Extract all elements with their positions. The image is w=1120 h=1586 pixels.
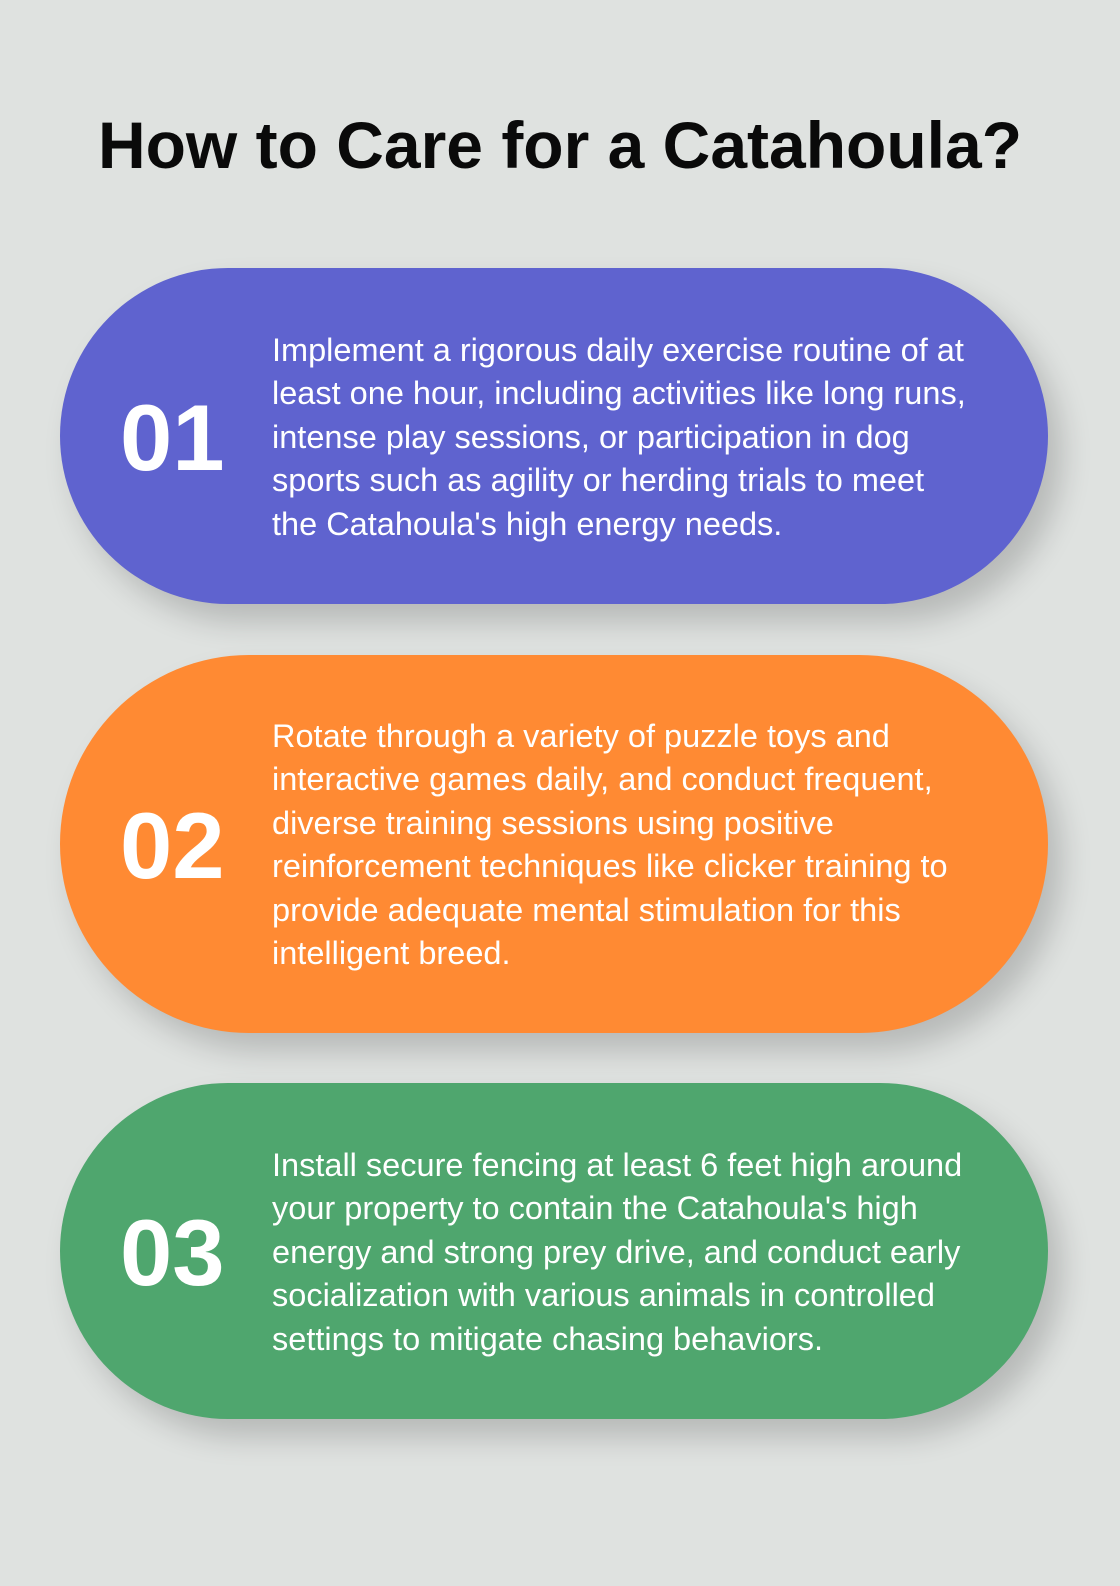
text 02: Rotate through a variety of puzzle toys and — [272, 718, 890, 754]
text 01: sports such as agility or herding trials to meet — [272, 462, 924, 498]
panel: step 02 — [60, 655, 1048, 1033]
text 03: socialization with various animals in controlled — [272, 1277, 935, 1313]
text 01 — [272, 332, 966, 542]
text 03: settings to mitigate chasing behaviors. — [272, 1321, 823, 1357]
text 02: provide adequate mental stimulation for this — [272, 892, 901, 928]
text 03: energy and strong prey drive, and conduct early — [272, 1234, 960, 1270]
panel: step 01 — [60, 268, 1048, 604]
text 02: reinforcement techniques like clicker training to — [272, 848, 948, 884]
text 01: Implement a rigorous daily exercise routine of at — [272, 332, 964, 368]
text 01: least one hour, including activities like long runs, — [272, 375, 966, 411]
text 02: interactive games daily, and conduct frequent, — [272, 761, 933, 797]
number 03: 03 — [120, 1200, 225, 1305]
text 01: intense play sessions, or participation in dog — [272, 419, 910, 455]
title: How to Care for a Catahoula? — [98, 108, 1022, 182]
text 02 — [272, 718, 948, 971]
text 03: your property to contain the Catahoula's high — [272, 1190, 918, 1226]
number 01: 01 — [120, 385, 225, 490]
panel: step 03 — [60, 1083, 1048, 1419]
text 01: the Catahoula's high energy needs. — [272, 506, 782, 542]
number 02: 02 — [120, 793, 225, 898]
text 02: diverse training sessions using positive — [272, 805, 834, 841]
text 03: Install secure fencing at least 6 feet high around — [272, 1147, 962, 1183]
text 02: intelligent breed. — [272, 935, 510, 971]
text 03 — [272, 1147, 962, 1357]
